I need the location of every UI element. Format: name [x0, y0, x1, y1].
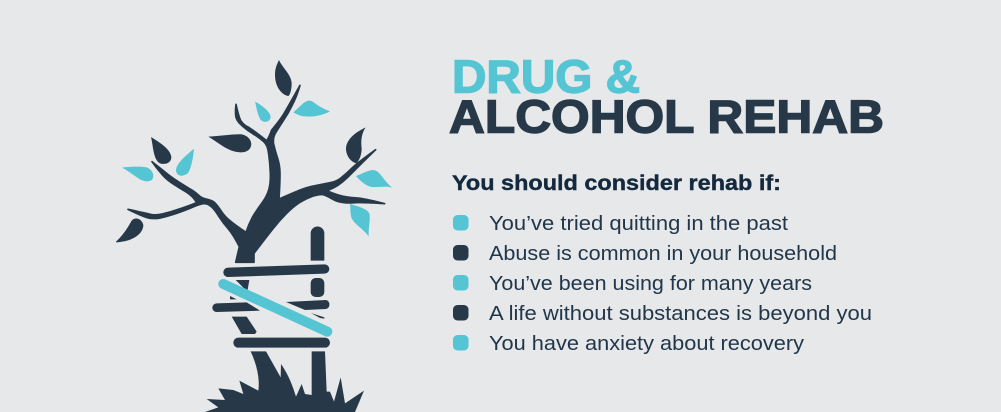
splint and lower trunk — [205, 226, 364, 412]
trunk fragments between sticks — [230, 280, 324, 334]
bullet teal — [453, 215, 468, 230]
subheading: You should consider rehab if: — [452, 171, 781, 195]
middle vertical splint — [311, 278, 324, 297]
list item 2 — [453, 242, 837, 265]
lower horizontal stick — [238, 328, 325, 358]
leaf: left teal — [176, 149, 194, 176]
leaf: far left teal — [122, 167, 153, 181]
leaf: top teal right — [293, 101, 330, 117]
middle horizontal stick right — [286, 300, 329, 310]
item text 5: You have anxiety about recovery — [489, 332, 805, 355]
item text 3: You’ve been using for many years — [489, 272, 812, 295]
illustration: bandaged tree — [116, 60, 392, 412]
title line: DRUG &: DRUG & — [452, 51, 640, 103]
leaf: right teal — [356, 170, 392, 188]
item text 2: Abuse is common in your household — [489, 242, 837, 265]
trunk base and grass — [205, 351, 364, 412]
middle horizontal stick left — [212, 302, 260, 312]
list item 4 — [453, 302, 872, 325]
tree branches and upper trunk — [128, 85, 385, 262]
upper vertical splint — [311, 226, 324, 261]
bullet dark — [453, 305, 468, 320]
leaf: small teal — [255, 102, 271, 122]
leaf: right dark — [346, 127, 366, 163]
leaf: left dark — [151, 137, 171, 164]
title line: ALCOHOL REHAB: ALCOHOL REHAB — [449, 91, 884, 143]
teal diagonal bandage — [223, 284, 327, 332]
leaf: large dark centre — [208, 134, 251, 152]
bullet teal — [453, 335, 468, 350]
upper horizontal stick — [228, 269, 325, 272]
item text 4: A life without substances is beyond you — [489, 302, 872, 325]
title — [449, 51, 884, 143]
list item 3 — [453, 272, 812, 295]
tree canopy — [116, 60, 392, 262]
bullet teal — [453, 275, 468, 290]
leaf: lower right teal — [350, 204, 370, 237]
leaf: top dark — [275, 60, 292, 96]
item text 1: You’ve tried quitting in the past — [489, 212, 788, 235]
checklist — [453, 212, 872, 355]
leaf: lower left dark — [116, 219, 143, 242]
bullet dark — [453, 245, 468, 260]
list item 5 — [453, 332, 805, 355]
list item 1 — [453, 212, 788, 235]
